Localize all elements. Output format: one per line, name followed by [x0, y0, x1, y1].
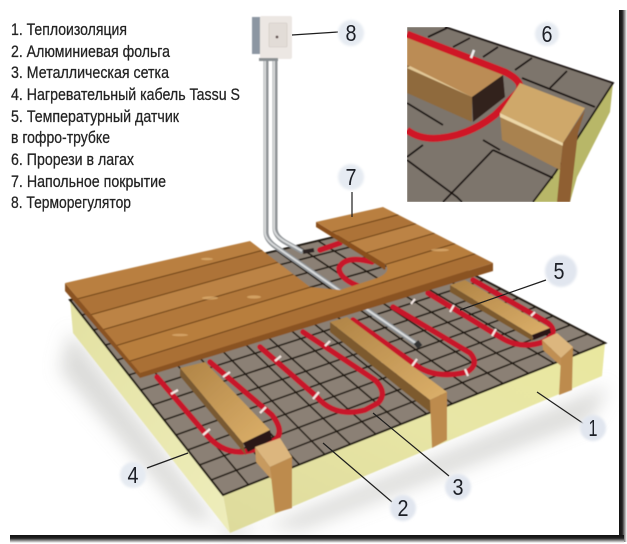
legend text — [11, 21, 240, 212]
callout 1: 1 — [588, 415, 598, 441]
inset foil surface — [407, 27, 613, 202]
legend text: 5. Температурный датчик — [11, 108, 180, 126]
callout 7: 7 — [346, 164, 356, 190]
inset heating cable — [407, 34, 520, 138]
legend text: 7. Напольное покрытие — [11, 173, 166, 191]
knob — [276, 36, 278, 38]
control box — [260, 16, 292, 59]
joist 2 — [330, 317, 447, 448]
callout 6: 6 — [542, 21, 552, 47]
thermostat — [252, 16, 292, 61]
callout 5 — [545, 255, 577, 287]
legend text: 8. Терморегулятор — [11, 194, 131, 212]
inset front joist — [500, 83, 585, 202]
legend text: 6. Прорези в лагах — [11, 151, 135, 169]
leader lines — [147, 32, 590, 502]
board planks — [64, 206, 494, 373]
callout 5: 5 — [554, 258, 564, 284]
board front thickness — [65, 263, 493, 378]
callout 6 — [535, 21, 559, 47]
cable clips — [171, 299, 535, 435]
inset: joist slots detail — [407, 27, 613, 202]
inset cable clip — [471, 50, 474, 58]
callout 1 — [580, 415, 606, 441]
callout 4 — [120, 462, 146, 488]
callout 7 — [338, 164, 364, 190]
legend text: 1. Теплоизоляция — [11, 21, 127, 39]
joist 3 — [450, 280, 573, 395]
heating cable loops — [157, 243, 553, 452]
callout 8: 8 — [346, 20, 356, 46]
callout 2 — [390, 495, 416, 521]
legend text: в гофро-трубке — [11, 129, 110, 147]
callout 2: 2 — [398, 495, 408, 521]
mounting bracket — [252, 17, 261, 54]
callout 3: 3 — [452, 474, 464, 500]
metal mesh grid — [70, 226, 605, 495]
temperature sensor corrugated tube — [265, 60, 420, 347]
callout 3 — [445, 474, 471, 500]
inset foam — [533, 83, 613, 202]
notch side face — [316, 222, 386, 270]
joist 1 — [180, 362, 292, 513]
slab shadow — [60, 330, 610, 540]
conduit collar — [259, 58, 278, 61]
callout 4: 4 — [128, 462, 139, 488]
insulation foam layer — [70, 300, 605, 533]
inset left joist — [407, 37, 505, 122]
legend text: 4. Нагревательный кабель Tassu S — [11, 86, 240, 104]
inner panel — [269, 23, 287, 47]
inset mesh — [407, 27, 613, 202]
wooden floor covering — [64, 206, 494, 378]
legend text: 2. Алюминиевая фольга — [11, 43, 171, 61]
callout 8 — [338, 20, 364, 46]
legend text: 3. Металлическая сетка — [11, 64, 170, 82]
aluminium foil surface — [70, 226, 605, 495]
